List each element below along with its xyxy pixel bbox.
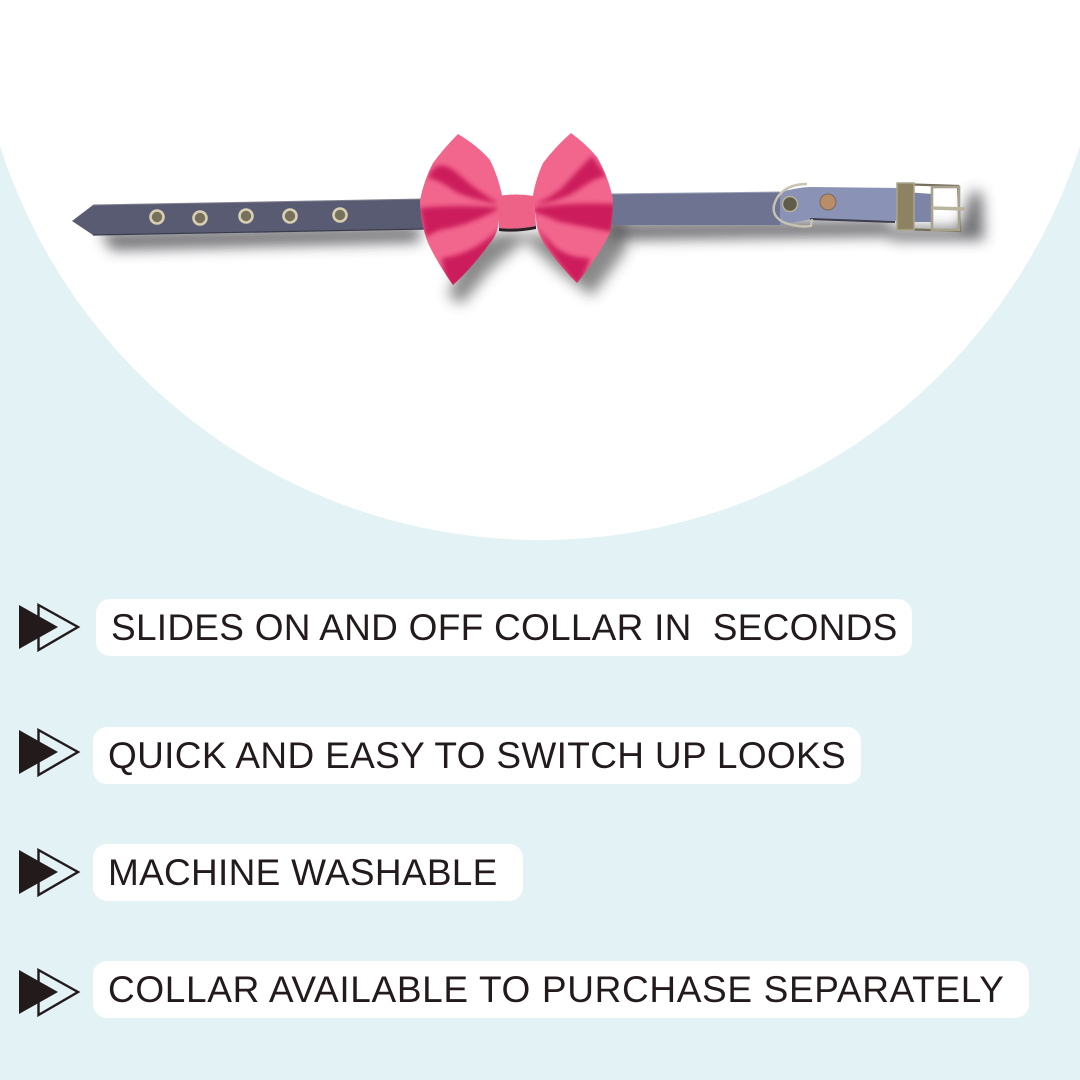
buckle: [897, 183, 965, 231]
bow shadow: [448, 205, 626, 304]
right wing: [533, 133, 613, 283]
arrow icon 4: [19, 968, 80, 1018]
collar shadow: [100, 190, 984, 250]
feature row 2: [19, 727, 861, 784]
white circle: [0, 0, 1080, 540]
collar strap: dark tip section: [72, 199, 425, 235]
collar strap: buckle section: [608, 183, 965, 231]
label 2: QUICK AND EASY TO SWITCH UP LOOKS: [108, 735, 846, 776]
feature row 4: [19, 961, 1029, 1018]
rivets: [782, 196, 798, 212]
feature row 1: [19, 599, 912, 656]
label 2: [93, 727, 861, 784]
bow tie: [415, 130, 618, 290]
label 1: SLIDES ON AND OFF COLLAR IN SECONDS: [111, 607, 898, 648]
arrow icon 2: [19, 728, 80, 778]
bow knot: [498, 194, 536, 229]
feature row 3: [19, 844, 523, 901]
D ring: [774, 184, 812, 226]
grommets: [150, 208, 346, 224]
label 4: [93, 961, 1029, 1018]
product: collar with bow: [72, 130, 984, 304]
label 4: COLLAR AVAILABLE TO PURCHASE SEPARATELY: [108, 969, 1005, 1010]
arrow icon 3: [19, 848, 80, 898]
label 1: [96, 599, 912, 656]
label 3: MACHINE WASHABLE: [108, 852, 498, 893]
label 3: [93, 844, 523, 901]
left wing: [420, 134, 502, 285]
arrow icon 1: [19, 603, 80, 652]
white circle backdrop and product photo: [0, 0, 1080, 540]
